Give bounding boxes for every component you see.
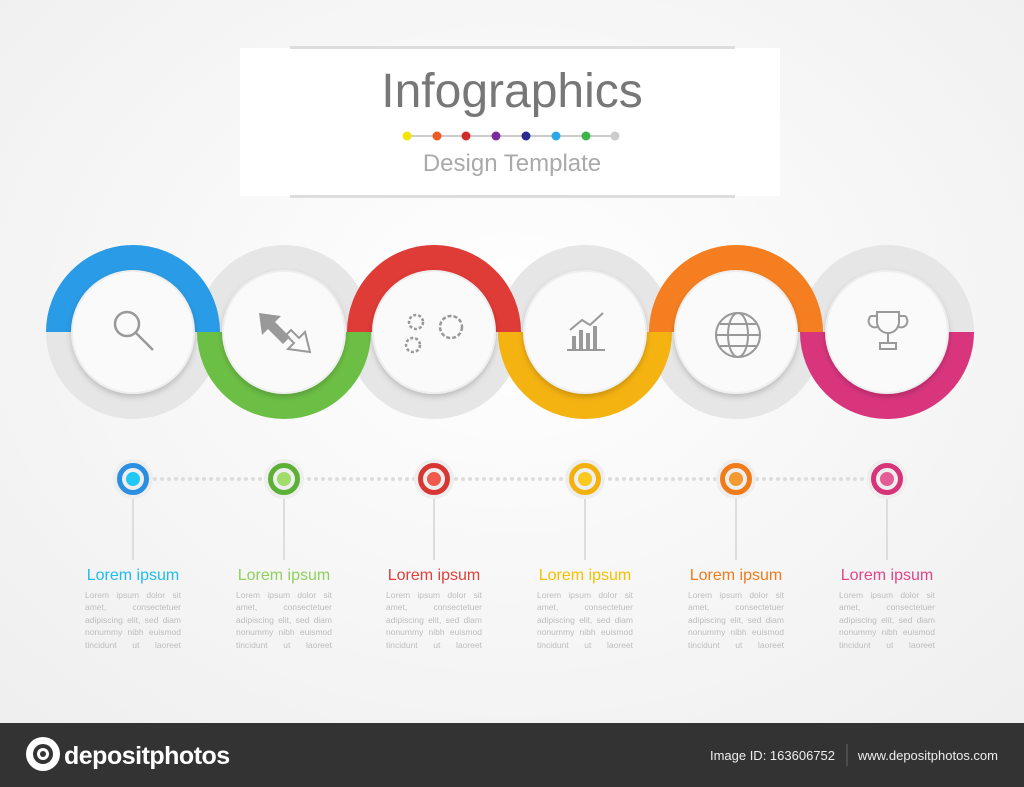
icon: globe [716,313,760,357]
item 4: Lorem ipsum dolor sit amet, consectetuer adipiscing elit, sed diam nonummy nibh euismod tincidunt ut laoreet [537,590,633,650]
subtitle: Design Template [423,150,601,177]
item 1: Lorem ipsum dolor sit amet, consectetuer adipiscing elit, sed diam nonummy nibh euismod tincidunt ut laoreet [85,590,181,650]
item 3: Lorem ipsum dolor sit amet, consectetuer adipiscing elit, sed diam nonummy nibh euismod tincidunt ut laoreet [386,590,482,650]
title box [240,46,780,198]
icon: chart [567,313,605,351]
footer bar: www.depositphotos.com [857,748,998,763]
ring chain [59,258,961,406]
item 2: Lorem ipsum dolor sit amet, consectetuer adipiscing elit, sed diam nonummy nibh euismod tincidunt ut laoreet [236,590,332,650]
item 1: Lorem ipsum [87,567,179,584]
timeline dotted line [155,477,865,481]
item 5: Lorem ipsum dolor sit amet, consectetuer adipiscing elit, sed diam nonummy nibh euismod tincidunt ut laoreet [688,590,784,650]
footer bar [0,723,1024,787]
pins [115,461,905,560]
logo [26,737,230,771]
item 3: Lorem ipsum [388,567,480,584]
icon: arrows [259,313,310,352]
image id: Image ID: 163606752 [710,748,835,763]
icon: gears [406,315,462,352]
item 4: Lorem ipsum [539,567,631,584]
icon: trophy [869,312,907,349]
item 6: Lorem ipsum [841,567,933,584]
title: Infographics [381,65,643,118]
item 6: Lorem ipsum dolor sit amet, consectetuer adipiscing elit, sed diam nonummy nibh euismod tincidunt ut laoreet [839,590,935,650]
icon: magnifier [115,312,153,350]
item 2: Lorem ipsum [238,567,330,584]
logo: depositphotos [64,742,230,770]
item 5: Lorem ipsum [690,567,782,584]
color dots line [402,132,620,140]
